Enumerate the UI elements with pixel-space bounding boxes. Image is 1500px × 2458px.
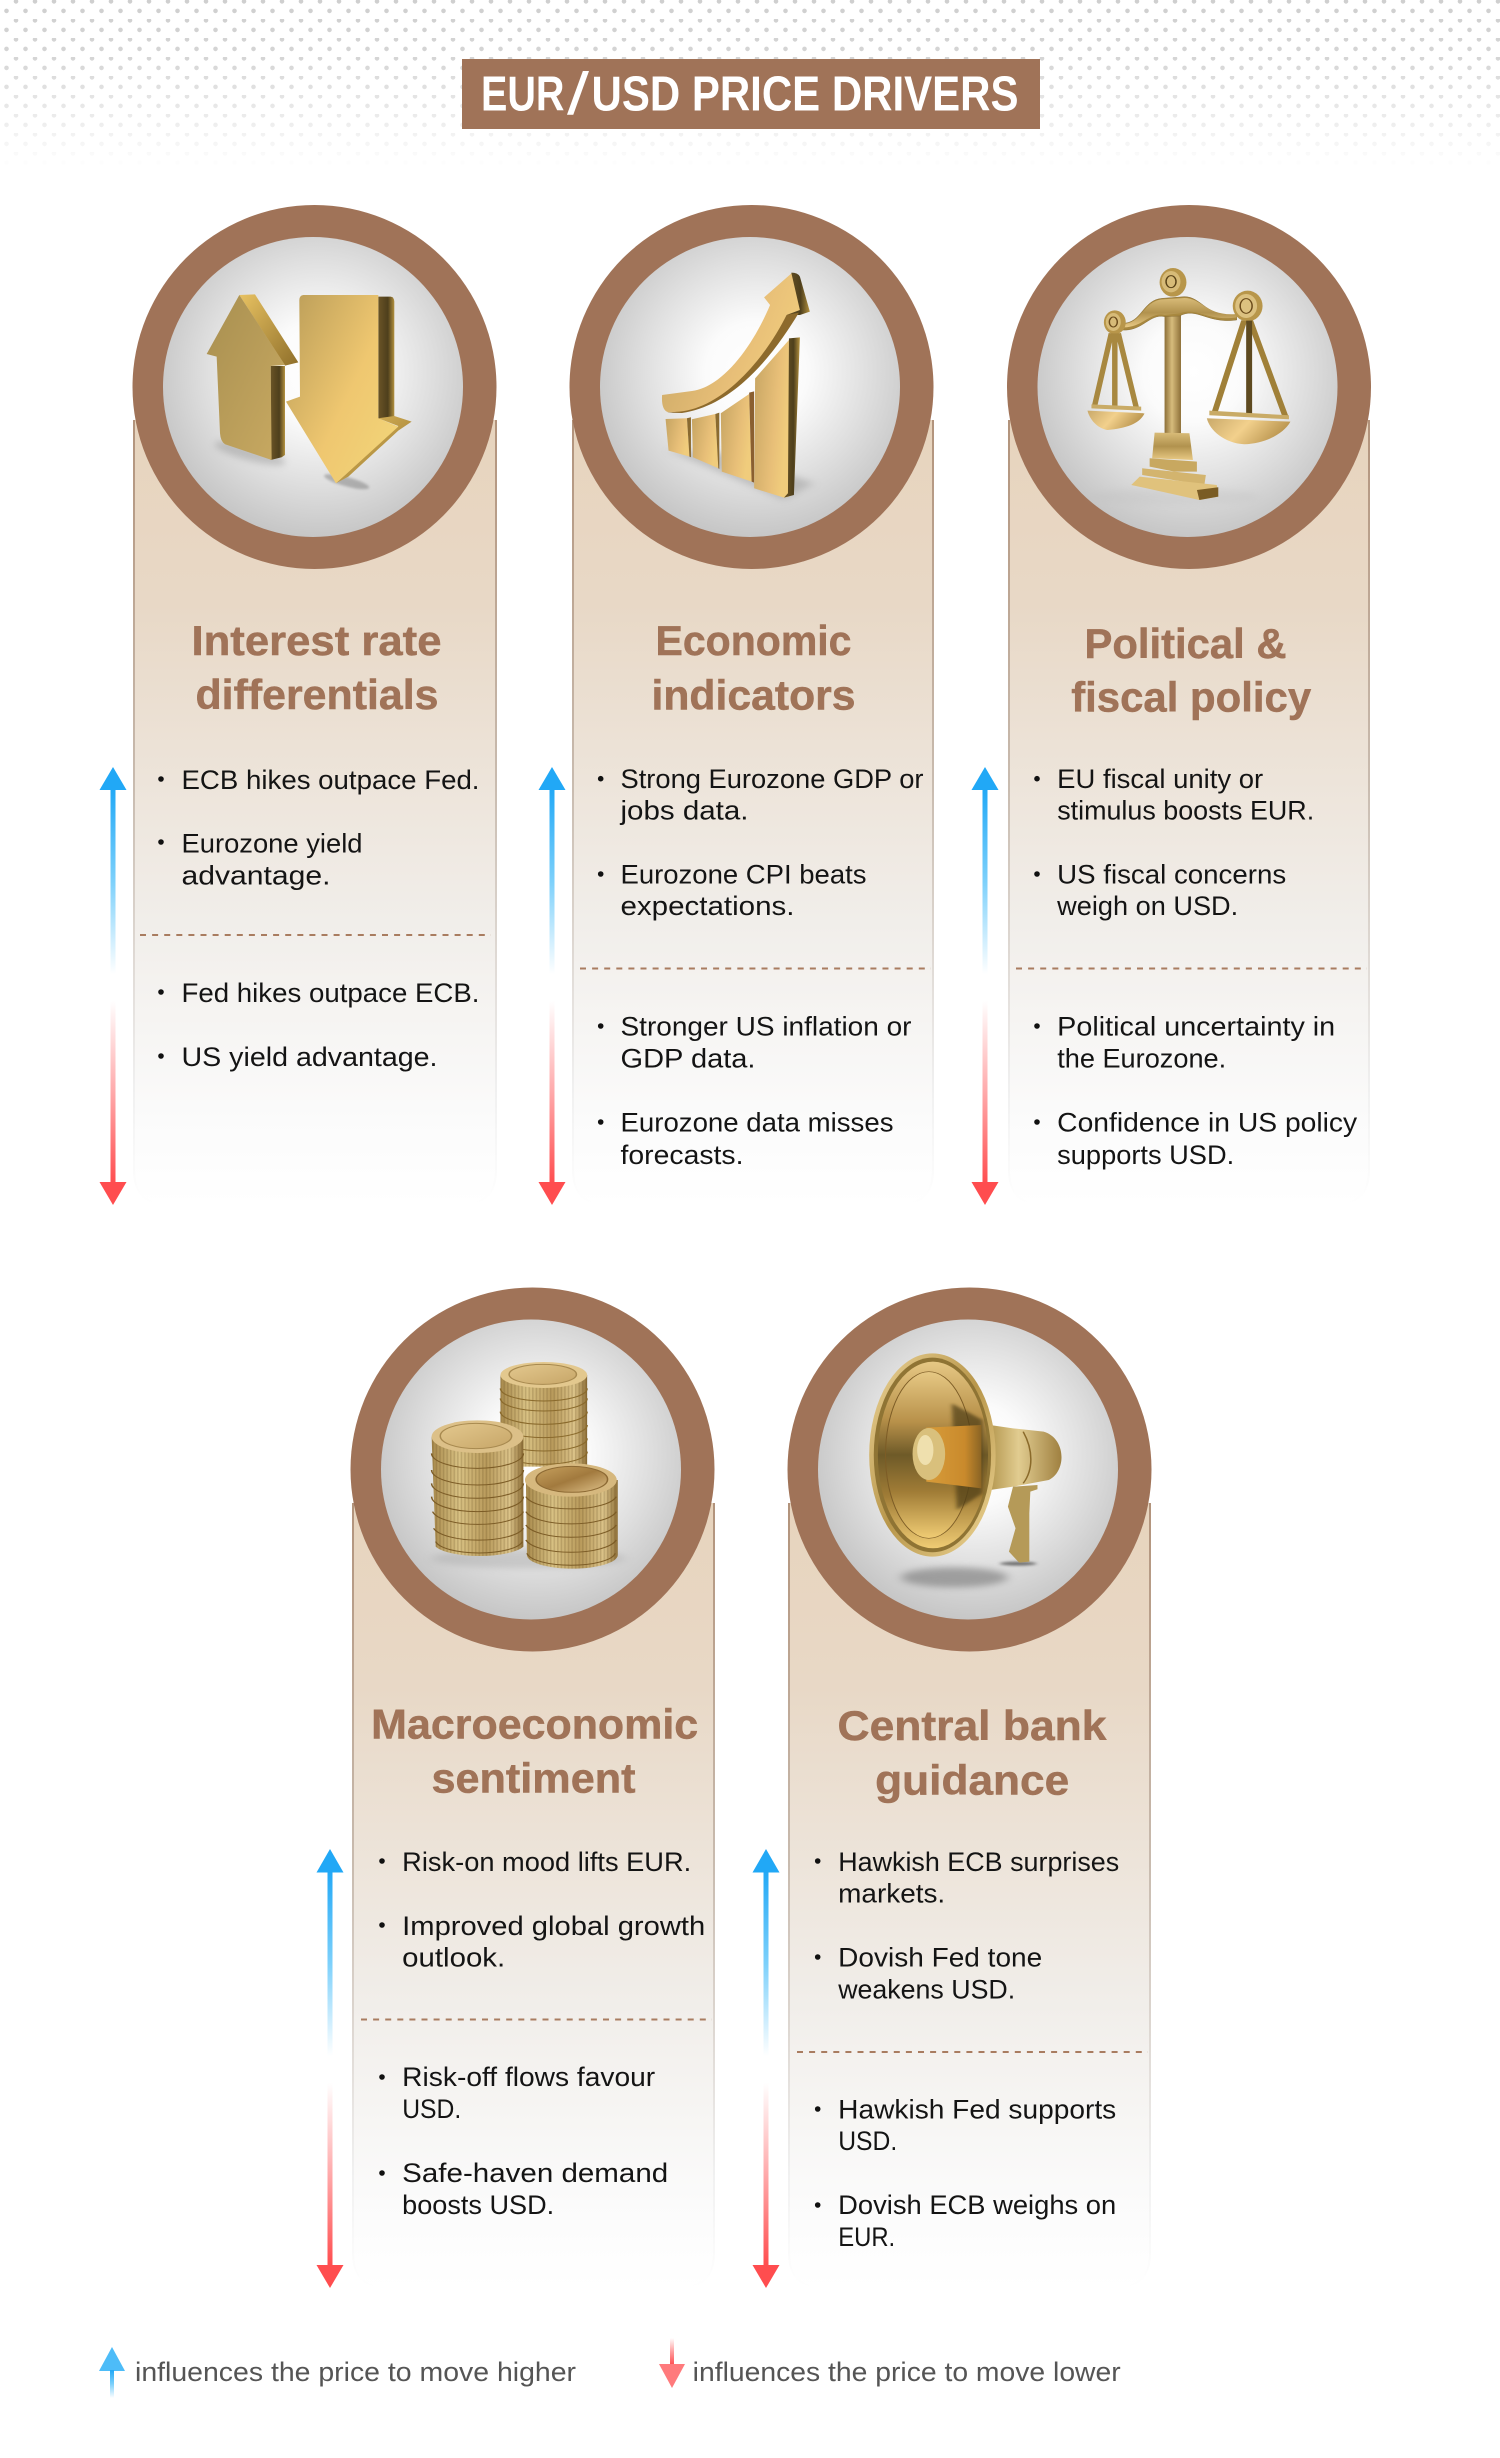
- arrow: up and down: [752, 1849, 780, 2288]
- title: EUR: [481, 68, 564, 122]
- panel: political and fiscal policy: [972, 205, 1371, 1205]
- icon: gold coin stacks: [350, 1288, 714, 1652]
- heading: [1071, 620, 1312, 720]
- bullet list: USD-positive drivers: forecasts.: [620, 1140, 744, 1170]
- heading: [192, 617, 442, 718]
- title: [462, 59, 1040, 129]
- arrow: up and down: [100, 767, 126, 1205]
- heading: Economic: [656, 617, 852, 664]
- bullet list: EUR-positive drivers: stimulus boosts EUR.: [1057, 796, 1314, 826]
- bullet list: USD-positive drivers: Political uncertainty in: [1057, 1012, 1335, 1042]
- bullet list: EUR-positive drivers: weakens USD.: [837, 1975, 1015, 2005]
- bullet list: EUR-positive drivers: outlook.: [402, 1943, 505, 1973]
- legend: price lower: influences the price to move lower: [693, 2357, 1121, 2387]
- bullet list: USD-positive drivers: Stronger US inflation or: [620, 1012, 912, 1042]
- bullet list: USD-positive drivers: Risk-off flows favour: [402, 2062, 655, 2092]
- heading: indicators: [652, 672, 856, 718]
- bullet list: EUR-positive drivers: Dovish Fed tone: [838, 1943, 1042, 1973]
- legend: [99, 2338, 1121, 2398]
- bullet list: USD-positive drivers: GDP data.: [620, 1044, 756, 1074]
- icon: gold megaphone: [788, 1288, 1152, 1652]
- bullet list: EUR-positive drivers: Strong Eurozone GDP or: [620, 764, 924, 794]
- title: /: [567, 61, 590, 127]
- bullet list: USD-positive drivers: Safe-haven demand: [402, 2158, 668, 2188]
- bullet list: USD-positive drivers: USD.: [838, 2126, 897, 2156]
- heading: [371, 1700, 698, 1802]
- heading: Interest rate: [192, 617, 442, 664]
- bullet list: USD-positive drivers: supports USD.: [1057, 1140, 1234, 1170]
- bullet list: USD-positive drivers: [1034, 1012, 1358, 1170]
- bullet list: EUR-positive drivers: Hawkish ECB surprises: [838, 1847, 1119, 1877]
- heading: guidance: [875, 1757, 1069, 1804]
- bullet list: EUR-positive drivers: advantage.: [182, 860, 330, 890]
- bullet list: USD-positive drivers: boosts USD.: [402, 2190, 554, 2220]
- bullet list: EUR-positive drivers: ECB hikes outpace Fed.: [182, 765, 480, 795]
- heading: [652, 617, 856, 718]
- heading: Political &: [1084, 620, 1286, 667]
- bullet list: USD-positive drivers: US yield advantage.: [182, 1042, 438, 1072]
- bullet list: EUR-positive drivers: weigh on USD.: [1056, 891, 1238, 921]
- heading: differentials: [196, 671, 438, 718]
- arrow: up and down: [538, 767, 566, 1205]
- bullet list: EUR-positive drivers: EU fiscal unity or: [1057, 764, 1263, 794]
- bullet list: EUR-positive drivers: Risk-on mood lifts EUR.: [402, 1847, 691, 1877]
- panel background: [134, 420, 496, 1205]
- panel background: [789, 1503, 1150, 2288]
- bullet list: EUR-positive drivers: [379, 1847, 705, 1973]
- bullet list: EUR-positive drivers: [1034, 764, 1314, 921]
- bullet list: USD-positive drivers: the Eurozone.: [1057, 1044, 1226, 1074]
- legend: price higher: [99, 2347, 576, 2398]
- heading: [838, 1702, 1107, 1804]
- icon: gold up and down arrows: [132, 205, 496, 569]
- bullet list: USD-positive drivers: [158, 978, 479, 1072]
- bullet list: USD-positive drivers: Eurozone data misses: [620, 1108, 894, 1138]
- bullet list: USD-positive drivers: Hawkish Fed supports: [838, 2095, 1116, 2125]
- bullet list: USD-positive drivers: Fed hikes outpace ECB.: [182, 978, 480, 1008]
- icon: gold rising chart: [570, 205, 934, 569]
- bullet list: EUR-positive drivers: [598, 764, 924, 921]
- heading: Central bank: [838, 1702, 1107, 1749]
- panel background: [573, 420, 933, 1205]
- bullet list: EUR-positive drivers: [815, 1847, 1119, 2005]
- bullet list: USD-positive drivers: [379, 2062, 668, 2220]
- panel: economic indicators: [538, 205, 934, 1205]
- bullet list: EUR-positive drivers: jobs data.: [619, 796, 748, 826]
- bullet list: EUR-positive drivers: markets.: [838, 1878, 945, 1908]
- bullet list: USD-positive drivers: Dovish ECB weighs on: [838, 2190, 1116, 2220]
- bullet list: USD-positive drivers: EUR.: [838, 2222, 895, 2252]
- title: USD PRICE DRIVERS: [592, 68, 1018, 122]
- bullet list: EUR-positive drivers: US fiscal concerns: [1057, 860, 1286, 890]
- bullet list: EUR-positive drivers: Improved global growth: [402, 1911, 705, 1941]
- panel: central bank guidance: [752, 1288, 1152, 2288]
- panel background: [353, 1503, 714, 2288]
- bullet list: USD-positive drivers: [598, 1012, 912, 1170]
- panel: macroeconomic sentiment: [316, 1288, 714, 2288]
- bullet list: EUR-positive drivers: [158, 765, 479, 890]
- bullet list: USD-positive drivers: USD.: [402, 2094, 461, 2124]
- bullet list: USD-positive drivers: Confidence in US policy: [1057, 1108, 1358, 1138]
- icon: gold scales: [1007, 205, 1371, 569]
- panel background: [1009, 420, 1369, 1205]
- heading: sentiment: [432, 1755, 636, 1802]
- heading: fiscal policy: [1071, 674, 1312, 720]
- bullet list: EUR-positive drivers: expectations.: [620, 891, 794, 921]
- legend: price lower: [659, 2338, 1121, 2388]
- bullet list: EUR-positive drivers: Eurozone CPI beats: [620, 860, 866, 890]
- heading: Macroeconomic: [371, 1700, 698, 1748]
- bullet list: EUR-positive drivers: Eurozone yield: [182, 828, 362, 858]
- legend: price higher: influences the price to move higher: [135, 2357, 576, 2387]
- bullet list: USD-positive drivers: [815, 2095, 1116, 2252]
- arrow: up and down: [972, 767, 998, 1205]
- panel: interest rate differentials: [100, 205, 496, 1205]
- arrow: up and down: [316, 1849, 344, 2288]
